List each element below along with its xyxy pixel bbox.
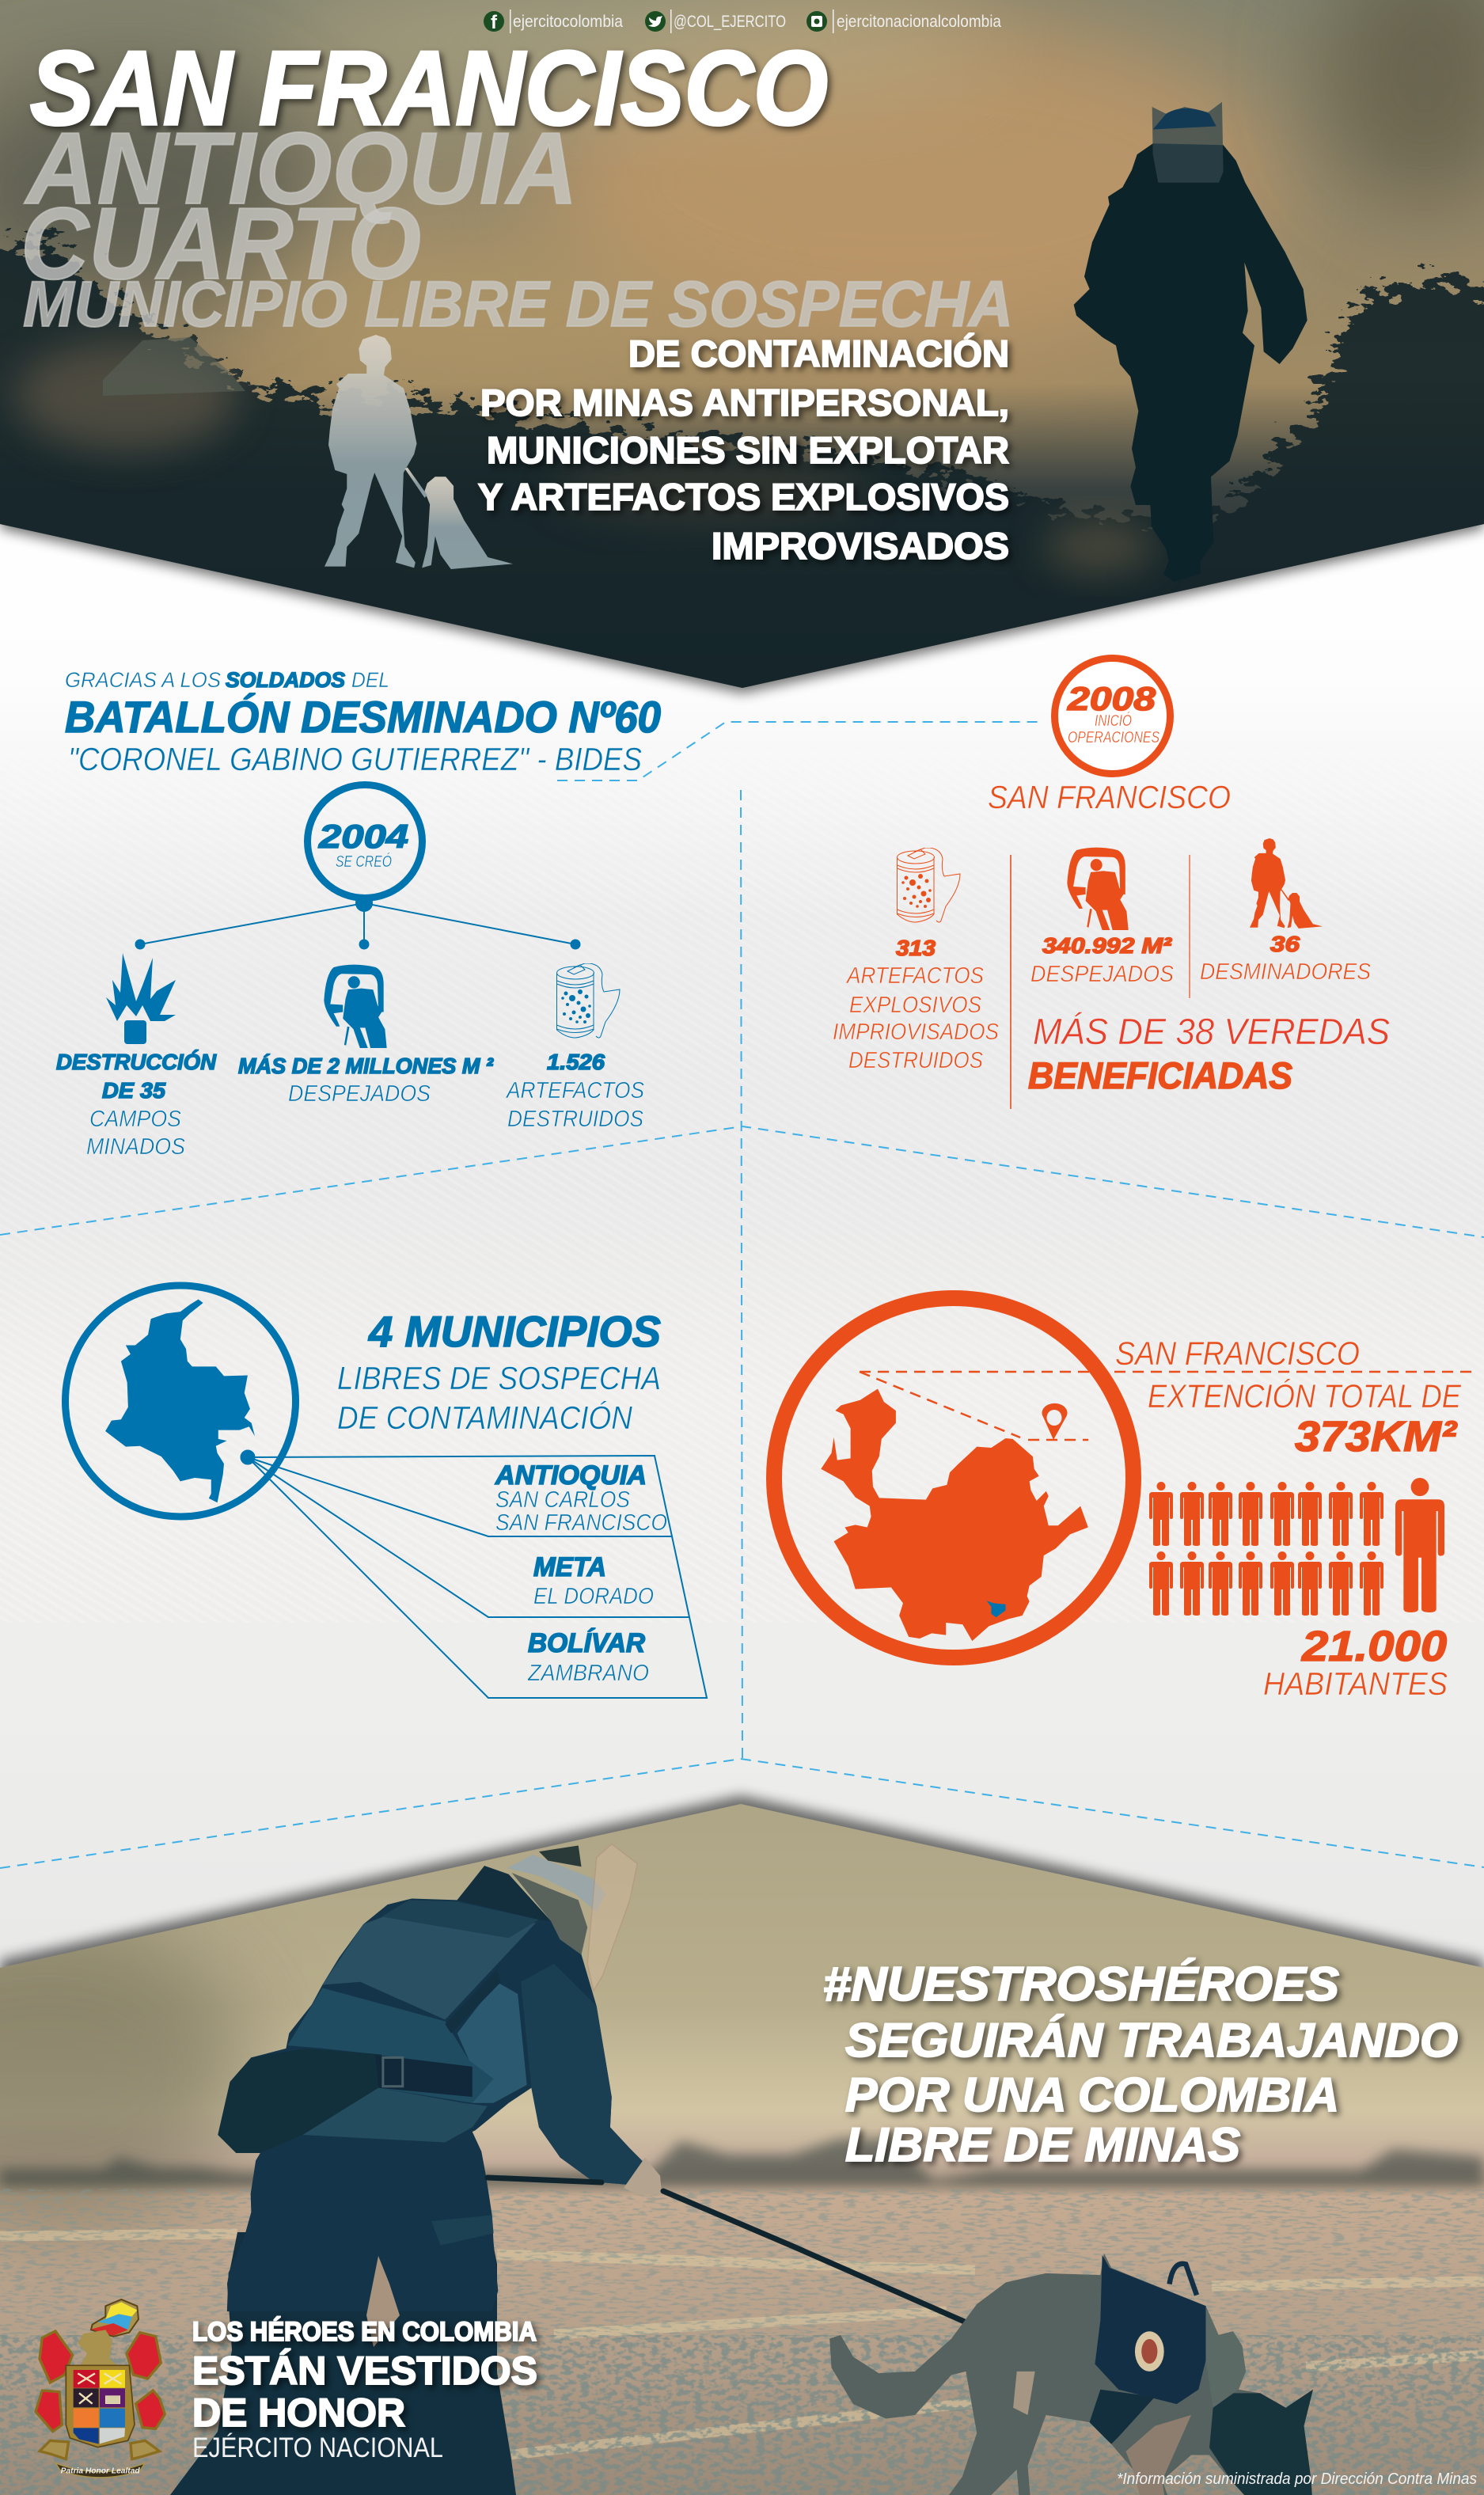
heading: 4 municipios <box>337 1307 661 1436</box>
icon: army coat of arms <box>36 2299 165 2478</box>
subtitle: Cuarto: CUARTO <box>21 187 421 301</box>
hero text block: DE CONTAMINACIÓN <box>628 332 1009 374</box>
battalion subname: "CORONEL GABINO GUTIERREZ" - BIDES <box>68 741 642 777</box>
lower hero shadow <box>0 1795 1484 1995</box>
item: destrucción de 35: DESTRUCCIÓN <box>56 1050 217 1074</box>
gracias line: DEL <box>351 668 389 692</box>
icon: facebook <box>484 11 504 33</box>
2004 tree diagram <box>136 785 579 948</box>
panel: lower photo <box>0 1797 1484 2495</box>
heading: 4 municipios: DE CONTAMINACIÓN <box>337 1399 632 1436</box>
item: 313: EXPLOSIVOS <box>849 993 982 1018</box>
icon: army coat of arms: Patria Honor Lealtad <box>61 2467 141 2475</box>
gracias line: SOLDADOS <box>226 668 345 692</box>
icon: tank in the smoke <box>103 337 245 396</box>
icon: deminer orange <box>1067 848 1129 930</box>
list: Meta: META <box>533 1552 606 1582</box>
gracias line: GRACIAS A LOS <box>65 668 221 692</box>
list: Antioquia: SAN FRANCISCO <box>495 1510 667 1536</box>
closing message: LIBRE DE MINAS <box>845 2118 1240 2171</box>
slogan: DE HONOR <box>192 2391 405 2435</box>
item: 313: IMPRIOVISADOS <box>833 1020 1000 1045</box>
badge 2004 <box>307 785 423 898</box>
deminer with dog lead <box>170 1844 662 2495</box>
item: 36: DESMINADORES <box>1200 959 1372 985</box>
icon: instagram <box>807 11 827 32</box>
item: 313 <box>833 936 1000 1073</box>
icon: deminer in frame <box>324 965 387 1048</box>
veredas statement: MÁS DE 38 VEREDAS <box>1033 1011 1390 1052</box>
closing message: SEGUIRÁN TRABAJANDO <box>845 2014 1458 2067</box>
distant tree line <box>0 2139 1484 2186</box>
badge 2008: INICIÓ <box>1095 712 1132 730</box>
badge 2004: SE CREÓ <box>336 853 392 871</box>
twitter handle: @COL_EJERCITO <box>674 13 786 31</box>
badge 2008: 2008 <box>1067 680 1156 717</box>
slogan: LOS HÉROES EN COLOMBIA <box>192 2317 537 2347</box>
icon: soldier and dog orange <box>1250 838 1323 929</box>
social links <box>484 9 1001 33</box>
badge 2008 <box>1054 659 1170 774</box>
list: Bolívar: ZAMBRANO <box>527 1661 649 1686</box>
dog <box>829 2254 1315 2495</box>
panel: central light background <box>0 443 1484 2026</box>
item: más de 2 millones: DESPEJADOS <box>288 1081 431 1107</box>
text: extension: 373KM² <box>1295 1413 1458 1460</box>
list: Meta: EL DORADO <box>533 1584 654 1609</box>
subtitle: Antioquia: ANTIOQUIA <box>24 112 578 226</box>
icon: facebook: f <box>491 12 498 33</box>
connectors <box>136 895 579 948</box>
list: Bolívar <box>527 1628 649 1686</box>
item: 36: 36 <box>1270 932 1300 956</box>
text: habitantes: HABITANTES <box>1263 1665 1448 1702</box>
list: Meta <box>533 1552 654 1609</box>
veredas statement: BENEFICIADAS <box>1028 1054 1292 1096</box>
text: extension: SAN FRANCISCO <box>1115 1335 1360 1372</box>
pin and leader lines <box>860 1372 1473 1440</box>
San Francisco label: SAN FRANCISCO <box>988 779 1231 815</box>
field texture <box>0 2189 1484 2495</box>
item: destrucción de 35: MINADOS <box>86 1134 186 1160</box>
icon: Colombia map <box>65 1285 296 1517</box>
brush silhouette <box>0 237 1484 712</box>
hero text block: POR MINAS ANTIPERSONAL, <box>480 382 1009 423</box>
item: 340.992 <box>1030 933 1175 987</box>
title: SAN FRANCISCO <box>30 30 828 147</box>
item: 1.526: ARTEFACTOS <box>505 1078 645 1103</box>
facebook handle: ejercitocolombia <box>513 13 623 31</box>
hero text block <box>478 332 1009 567</box>
icon: canister orange <box>898 848 960 922</box>
badge 2004: 2004 <box>318 818 408 855</box>
item: destrucción de 35: DE 35 <box>102 1078 165 1103</box>
panel: batallón heading <box>65 668 661 777</box>
closing message: POR UNA COLOMBIA <box>845 2068 1339 2121</box>
hero shadow <box>0 507 1484 693</box>
closing message <box>823 1958 1458 2171</box>
item: 313: 313 <box>896 936 936 960</box>
item: destrucción de 35: CAMPOS <box>89 1107 182 1132</box>
list: Antioquia <box>495 1460 667 1536</box>
item: 36 <box>1200 932 1372 985</box>
item: 1.526 <box>505 1050 645 1132</box>
item: destrucción de 35 <box>56 1050 217 1160</box>
text: habitantes: 21.000 <box>1301 1623 1447 1670</box>
leash <box>488 2178 1205 2408</box>
deminer silhouette <box>1074 102 1308 582</box>
icon: soldier and dog translucent <box>325 335 513 569</box>
text: extension <box>1115 1335 1462 1460</box>
municipios callout lines <box>241 1450 707 1698</box>
item: 313: DESTRUIDOS <box>848 1048 984 1073</box>
text: habitantes <box>1263 1623 1448 1702</box>
closing message: #NUESTROSHÉROES <box>823 1958 1339 2011</box>
gracias line <box>65 668 389 692</box>
heading: 4 municipios: LIBRES DE SOSPECHA <box>337 1360 661 1396</box>
hero text block: MUNICIONES SIN EXPLOTAR <box>487 429 1009 471</box>
marker tapes <box>0 2234 1484 2455</box>
item: 340.992: 340.992 M² <box>1042 933 1172 958</box>
item: 313: ARTEFACTOS <box>845 963 985 989</box>
item: 1.526: DESTRUIDOS <box>507 1107 644 1132</box>
instagram handle: ejercitonacionalcolombia <box>837 13 1001 31</box>
hero text block: IMPROVISADOS <box>712 525 1009 567</box>
item: 1.526: 1.526 <box>547 1050 605 1074</box>
panel: top hero photo <box>0 0 1484 712</box>
list: Antioquia: SAN CARLOS <box>495 1487 631 1513</box>
subtitle: Municipio libre: MUNICIPIO LIBRE DE SOSPECHA <box>23 268 1013 340</box>
slogan <box>192 2317 537 2463</box>
list: Bolívar: BOLÍVAR <box>528 1628 645 1658</box>
dashed dividers <box>0 722 1484 1868</box>
list: Antioquia: ANTIOQUIA <box>495 1460 647 1491</box>
icon: explosion <box>106 953 176 1044</box>
battalion name: BATALLÓN DESMINADO Nº60 <box>65 692 661 742</box>
item: más de 2 millones <box>238 1054 494 1107</box>
icon: canister blue <box>557 963 620 1038</box>
icon: population pictogram <box>1149 1478 1444 1616</box>
badge 2008: OPERACIONES <box>1068 729 1160 746</box>
slogan: ESTÁN VESTIDOS <box>192 2349 537 2393</box>
icon: twitter <box>645 11 666 32</box>
hero text block: Y ARTEFACTOS EXPLOSIVOS <box>478 476 1009 518</box>
icon: Antioquia map <box>774 1298 1133 1658</box>
heading: 4 municipios: 4 MUNICIPIOS <box>368 1307 661 1356</box>
veredas statement <box>1028 1011 1390 1096</box>
item: 340.992: DESPEJADOS <box>1030 962 1175 987</box>
item: más de 2 millones: MÁS DE 2 MILLONES M ² <box>238 1054 494 1078</box>
slogan: EJÉRCITO NACIONAL <box>192 2432 443 2463</box>
